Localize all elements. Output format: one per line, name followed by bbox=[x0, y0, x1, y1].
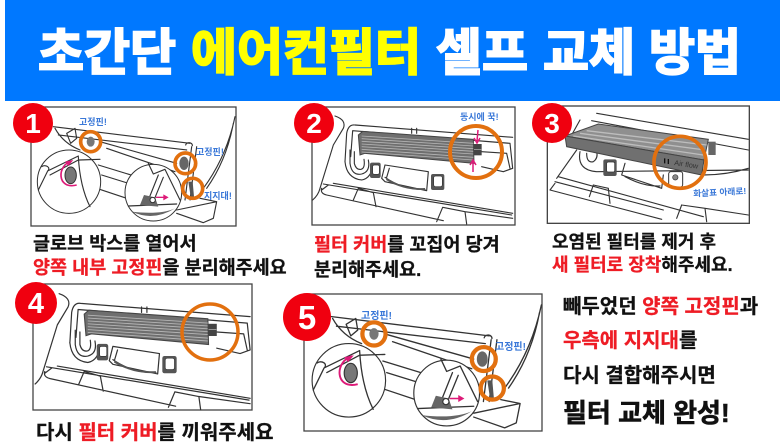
step 3 number badge bbox=[532, 103, 572, 143]
panel: step 3 bbox=[532, 103, 749, 275]
step 3 illustration bbox=[547, 106, 749, 223]
title: 초간단 bbox=[38, 25, 176, 81]
step 3 illustration: 화살표 아래로! bbox=[693, 185, 747, 199]
step 4 number badge: 4 bbox=[28, 288, 44, 320]
closing instructions: 다시 결합해주시면 bbox=[563, 364, 716, 387]
step 5 illustration bbox=[304, 294, 542, 431]
step 4 caption: 다시 필터 커버를 끼워주세요 bbox=[36, 421, 274, 444]
step 3 caption: 오염된 필터를 제거 후 bbox=[552, 232, 716, 252]
step 4 illustration bbox=[33, 284, 252, 410]
closing instructions: 빼두었던 양쪽 고정핀과 bbox=[563, 295, 758, 318]
title: 에어컨필터 bbox=[191, 25, 421, 81]
step 2 illustration: 동시에 꾹! bbox=[460, 112, 499, 122]
step 1 illustration bbox=[31, 107, 236, 226]
step 1 number badge bbox=[13, 103, 53, 143]
step 4 number badge bbox=[15, 282, 57, 324]
panel: step 5 bbox=[283, 293, 542, 431]
step 1 caption bbox=[33, 233, 287, 278]
step 2 number badge bbox=[294, 103, 334, 143]
step 3 illustration: Air flow bbox=[674, 158, 700, 171]
step 1 caption: 글로브 박스를 열어서 bbox=[33, 233, 196, 254]
panel: step 1 bbox=[13, 103, 287, 278]
closing instructions: 필터 교체 완성! bbox=[563, 398, 730, 428]
step 2 illustration bbox=[312, 107, 515, 225]
step 5 number badge: 5 bbox=[298, 299, 316, 336]
panel: step 4 bbox=[15, 282, 274, 444]
step 2 caption: 필터 커버를 꼬집어 당겨 bbox=[314, 234, 500, 255]
closing instructions: 우측에 지지대를 bbox=[563, 329, 697, 352]
header banner bbox=[5, 0, 780, 101]
title: 방법 bbox=[649, 25, 741, 81]
step 1 illustration: 고정핀! bbox=[196, 146, 224, 157]
panel: step 2 bbox=[294, 103, 515, 280]
closing instructions bbox=[563, 295, 758, 428]
title: 셀프 bbox=[436, 25, 528, 81]
step 1 illustration: 고정핀! bbox=[79, 116, 107, 127]
title: 교체 bbox=[543, 25, 635, 81]
step 3 caption bbox=[552, 232, 733, 275]
step 5 illustration: 고정핀! bbox=[361, 310, 392, 322]
step 1 illustration: 지지대! bbox=[204, 190, 232, 201]
step 5 number badge bbox=[283, 293, 331, 341]
step 2 caption bbox=[314, 234, 500, 280]
step 1 number badge: 1 bbox=[25, 108, 41, 139]
step 2 number badge: 2 bbox=[306, 108, 322, 139]
step 3 caption: 새 필터로 장착해주세요. bbox=[552, 255, 733, 275]
step 5 illustration: 고정핀! bbox=[495, 341, 526, 353]
title bbox=[38, 25, 741, 81]
step 3 number badge: 3 bbox=[544, 108, 560, 139]
step 2 caption: 분리해주세요. bbox=[314, 259, 421, 280]
step 1 caption: 양쪽 내부 고정핀을 분리해주세요 bbox=[33, 257, 287, 278]
